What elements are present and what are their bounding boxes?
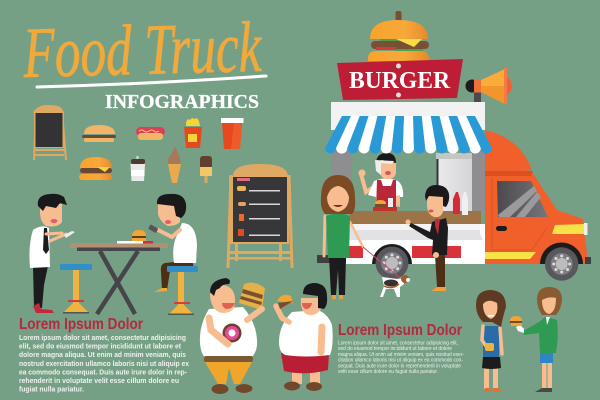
left heading: Lorem Ipsum Dolor <box>19 316 143 333</box>
man torso <box>200 307 257 359</box>
icon: hamburger <box>82 125 116 142</box>
woman legs and shoes <box>284 370 322 391</box>
woman head <box>301 283 327 315</box>
white fascia <box>331 102 485 130</box>
person: man in suit <box>406 185 449 291</box>
man legs and shoes <box>205 362 252 394</box>
right paragraph: velit esse cillum dolore eu fugiat nulla pariatur. <box>338 369 438 375</box>
left text block <box>19 316 189 394</box>
icon: small chalkboard <box>33 106 66 160</box>
subtitle: INFOGRAPHICS <box>105 91 259 113</box>
stool right <box>168 270 194 315</box>
right paragraph: sequat. Duis aute irure dolor in reprehenderit in voluptate <box>338 363 461 369</box>
right paragraph: magna aliqua. Ut enim ad minim veniam, quis nostrud exer- <box>338 352 464 358</box>
right text block <box>338 322 464 375</box>
rear wheel <box>372 244 412 280</box>
serving window posts <box>331 150 485 212</box>
burger sign <box>337 59 463 100</box>
offered burger <box>510 316 522 326</box>
person: woman in green jacket offering burger <box>510 287 562 392</box>
left paragraph: fugiat nulla pariatur. <box>19 385 84 394</box>
burger sign: BURGER <box>349 68 451 94</box>
table <box>70 230 168 314</box>
right heading: Lorem Ipsum Dolor <box>338 322 462 339</box>
stool left <box>60 264 92 314</box>
person: cook <box>358 153 403 211</box>
megaphone <box>466 68 512 104</box>
icon: popsicle <box>200 156 212 183</box>
food truck <box>317 11 591 281</box>
burger stack <box>239 283 265 310</box>
front wheel <box>540 242 583 281</box>
icon: menu board <box>228 164 292 268</box>
person: overweight man with donut and burger stack <box>200 278 265 394</box>
left paragraph: ea commodo consequat. Duis aute irure dolor in rep- <box>19 367 188 376</box>
person: seated man with phone <box>148 194 198 292</box>
woman burger <box>277 295 293 309</box>
condiment bottles <box>453 192 468 215</box>
man head <box>210 278 235 313</box>
icon: fries <box>184 118 202 148</box>
right paragraph: sed do eiusmod tempor incididunt ut labore et dolore <box>338 346 452 352</box>
icon: coffee cup <box>130 156 145 181</box>
truck rear body <box>317 224 485 264</box>
left paragraph: elit, sed do eiusmod tempor incididunt ut labore et <box>19 342 182 351</box>
left paragraph: Lorem ipsum dolor sit amet, consectetur adipisicing <box>19 333 186 342</box>
truck cab <box>485 130 591 264</box>
left paragraph: dolore magna aliqua. Ut enim ad minim veniam, quis <box>19 350 186 359</box>
right paragraph: Lorem ipsum dolor sit amet, consectetur adipisicing elit, <box>338 340 458 346</box>
person: overweight woman with burger <box>276 283 333 391</box>
dog on leash <box>363 247 410 297</box>
right paragraph: citation ullamco laboris nisi ut aliquip ex ea commodo con- <box>338 358 463 364</box>
icon: soft drink cup <box>221 118 244 149</box>
icon: hot dog <box>136 127 165 140</box>
person: woman in green with dog leash <box>321 175 363 299</box>
icon: ice cream cone <box>168 146 181 183</box>
right paragraph <box>338 340 464 375</box>
striped awning <box>325 116 492 154</box>
person: standing man with phone <box>29 194 75 313</box>
truck counter <box>350 211 481 224</box>
title: Food Truck <box>22 7 264 93</box>
icon: cheeseburger <box>79 157 112 180</box>
left paragraph: nostrud exercitation ullamco laboris nisi ut aliquip ex <box>19 359 189 368</box>
left paragraph: rehenderit in voluptate velit esse cillum dolore eu <box>19 376 179 385</box>
left paragraph <box>19 333 189 394</box>
roof burger <box>368 11 429 61</box>
woman torso <box>279 310 333 356</box>
person: woman in blue dress <box>476 290 506 392</box>
